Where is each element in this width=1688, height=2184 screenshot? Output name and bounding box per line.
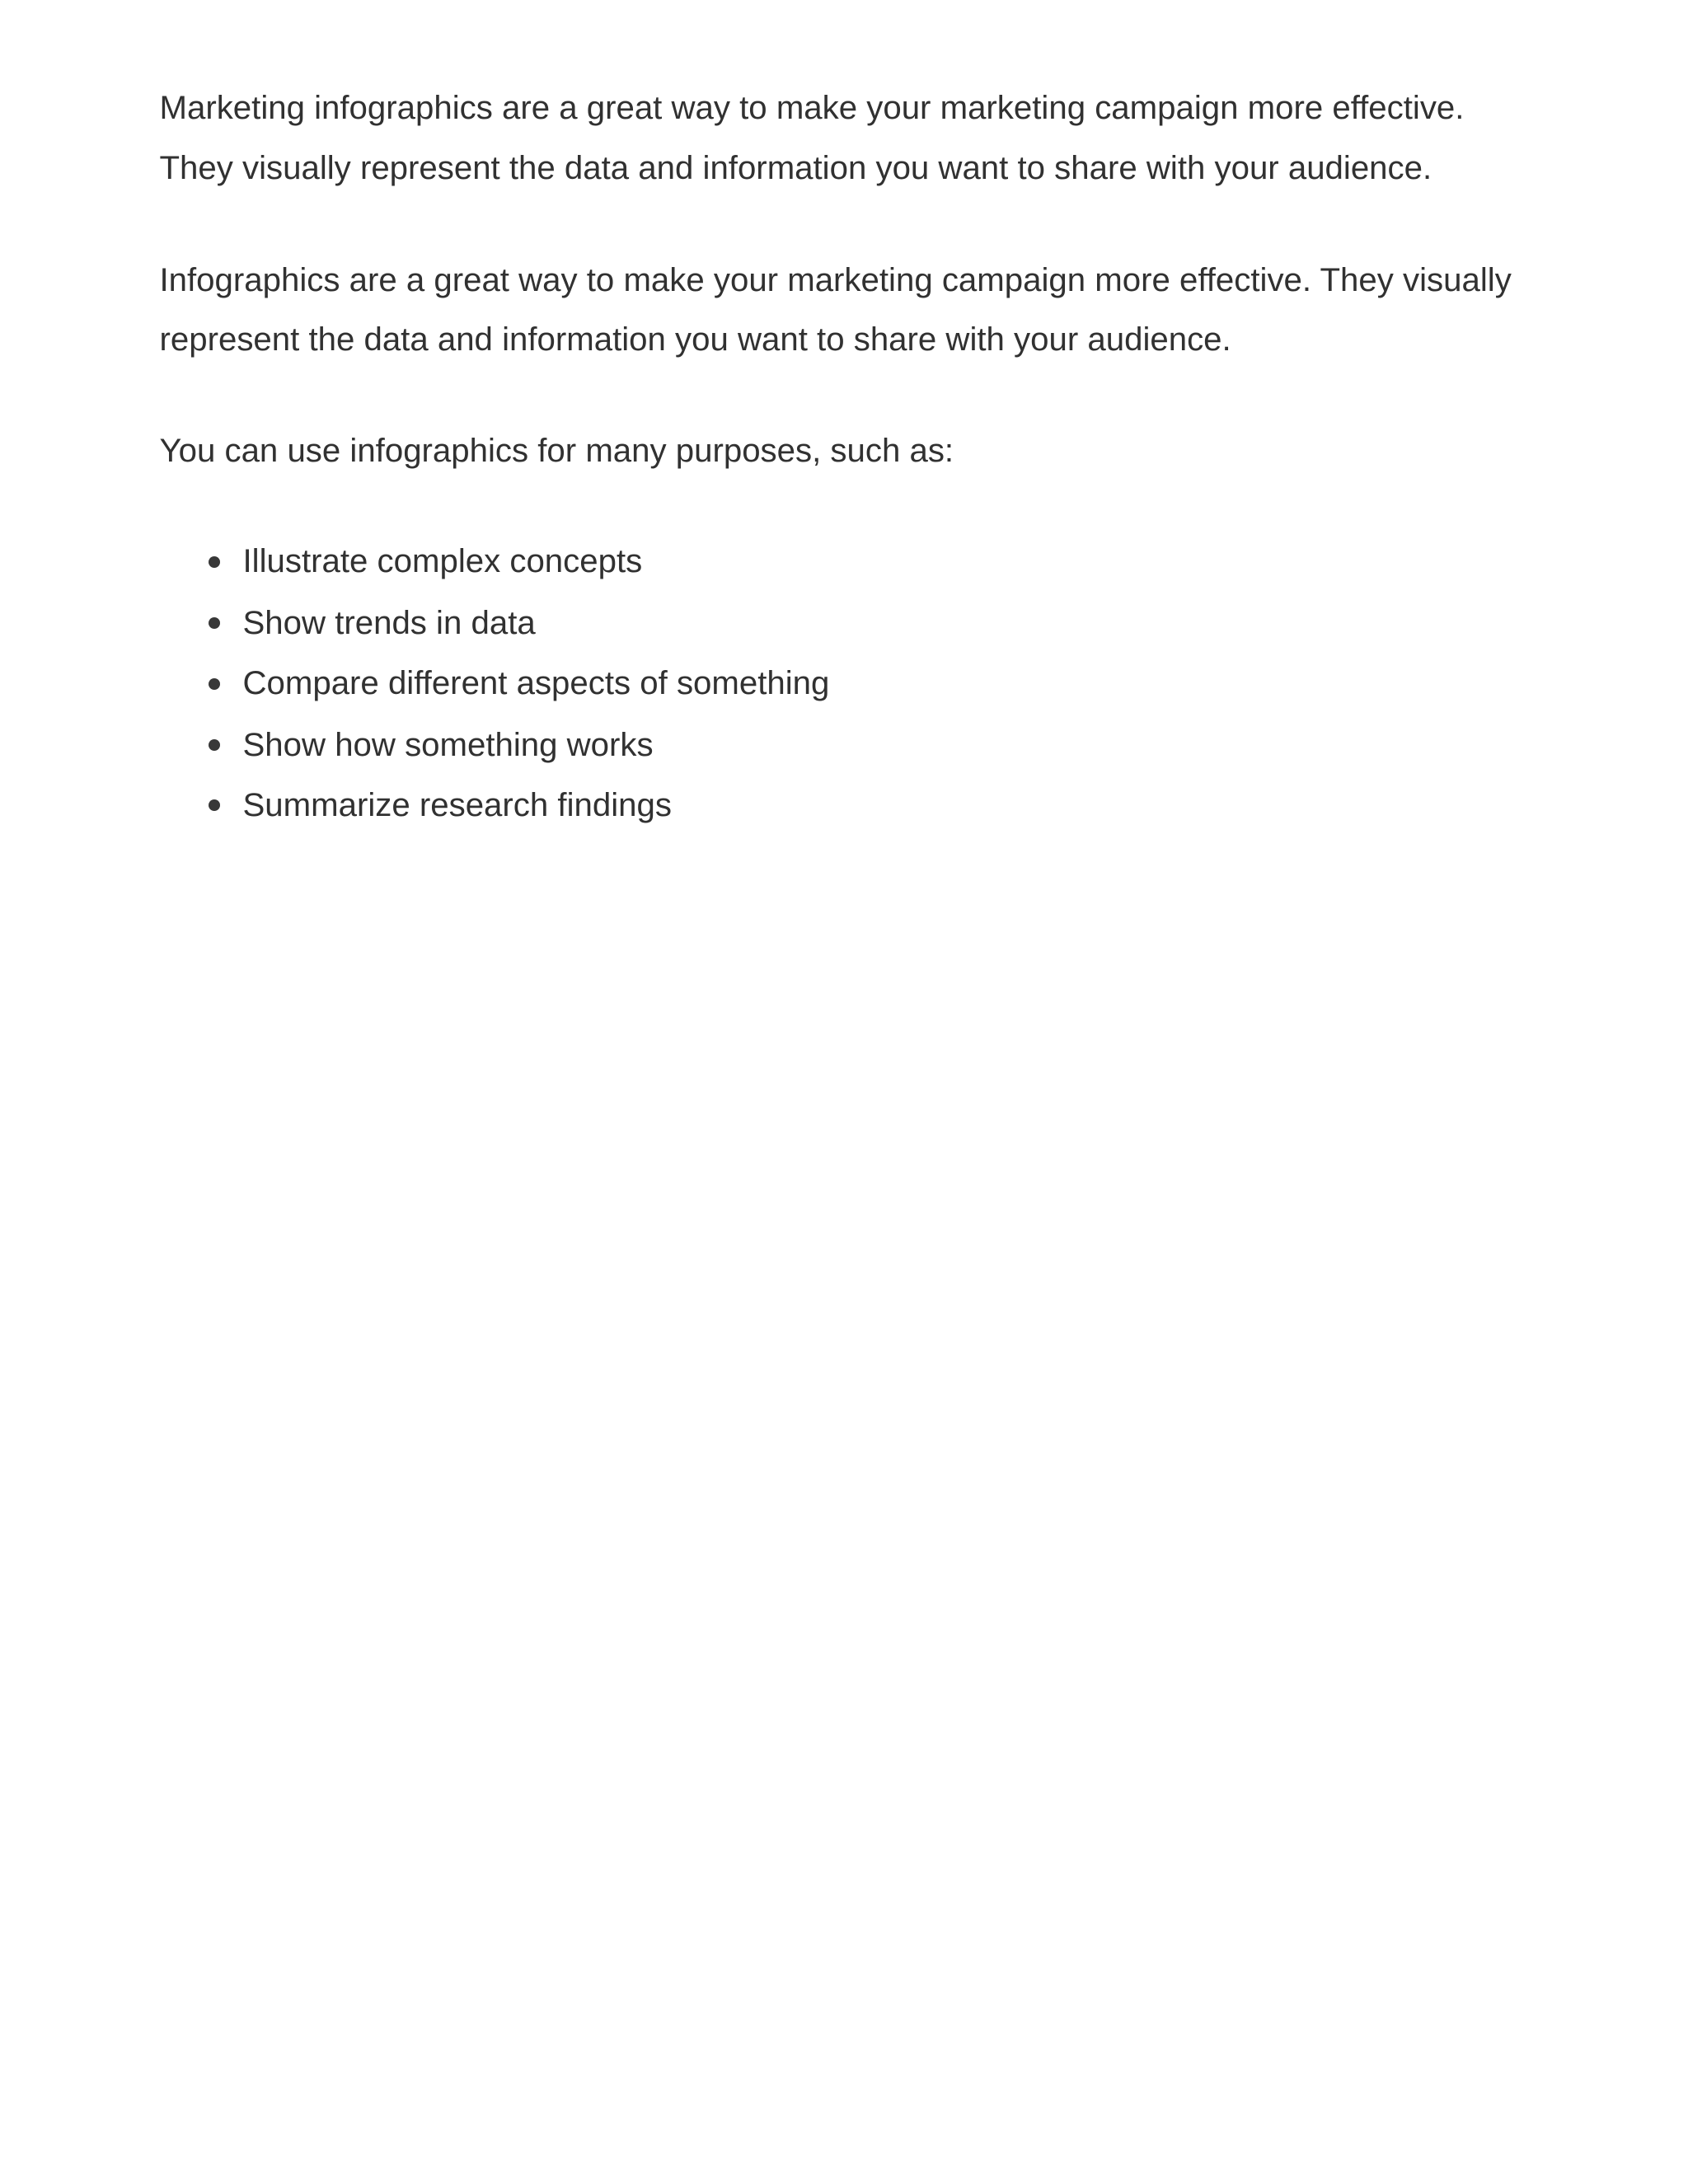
paragraph: list lead-in: You can use infographics for many purposes, such as:: [160, 432, 954, 469]
paragraph: marketing infographics intro: They visually represent the data and information you want to share with your audience.: [160, 149, 1432, 186]
paragraph: infographics effectiveness: represent the data and information you want to share with your audience.: [160, 321, 1231, 358]
paragraph: infographics effectiveness: Infographics are a great way to make your marketing campaign more effective. They visually: [160, 261, 1512, 298]
paragraph: infographics effectiveness: [160, 261, 1512, 358]
list item: summarize research findings: Summarize research findings: [242, 786, 672, 823]
list item: show trends in data: Show trends in data: [242, 604, 536, 641]
list item: illustrate complex concepts: Illustrate complex concepts: [242, 542, 642, 579]
paragraph: marketing infographics intro: [160, 89, 1464, 186]
list item: compare different aspects: Compare different aspects of something: [242, 664, 829, 701]
paragraph: marketing infographics intro: Marketing infographics are a great way to make your marketing campaign more effective.: [160, 89, 1464, 126]
list item: show how something works: Show how something works: [242, 726, 654, 763]
bulleted list of purposes: [209, 542, 829, 823]
